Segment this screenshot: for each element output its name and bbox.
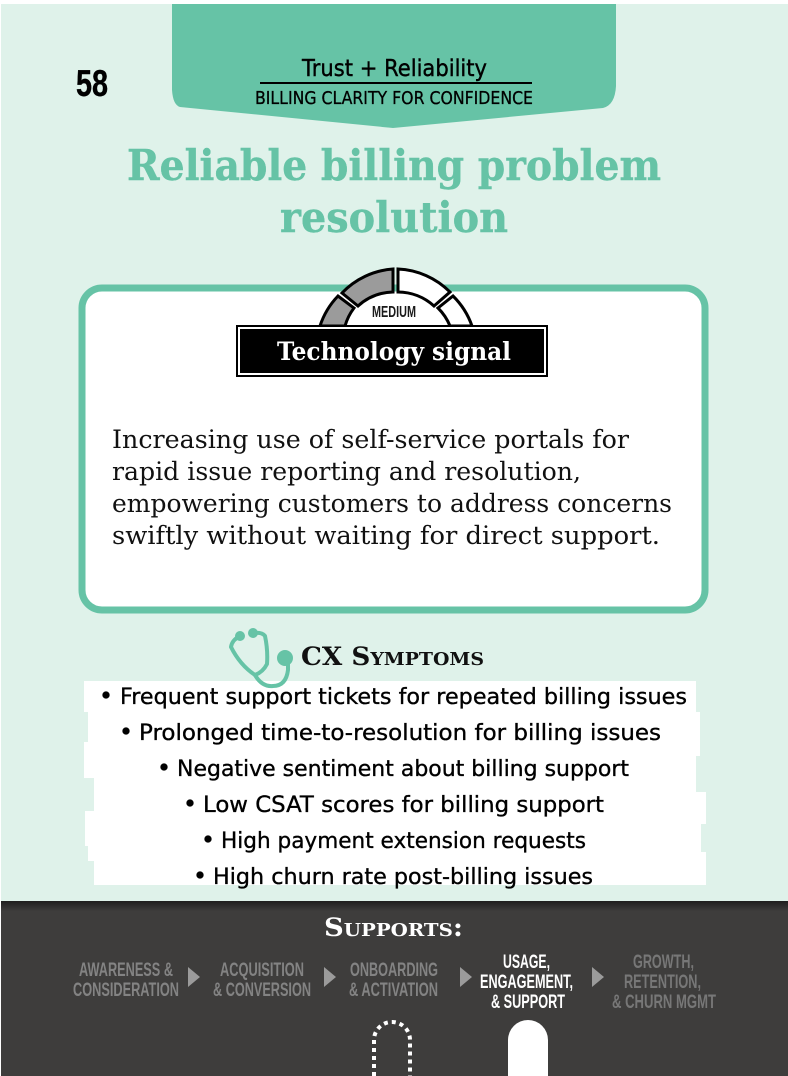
stage: usage (active): USAGE,: [503, 951, 550, 973]
stage: onboarding: ONBOARDING: [350, 959, 438, 981]
panel: supports footer: [1, 901, 788, 1076]
technology signal label: Technology signal: [277, 337, 511, 366]
stage: onboarding: [349, 959, 438, 1001]
symptoms list: [102, 685, 687, 890]
stage: usage (active): ENGAGEMENT,: [480, 971, 573, 993]
symptoms list: Low CSAT scores for billing support: [203, 793, 604, 818]
stage: growth: GROWTH,: [633, 951, 694, 973]
body text: empowering customers to address concerns: [112, 489, 672, 518]
body text: rapid issue reporting and resolution,: [112, 457, 581, 486]
white strips behind symptoms: [84, 681, 706, 885]
arrow: [460, 967, 472, 987]
heading: CX symptoms: CX Symptoms: [301, 642, 484, 671]
body text: Increasing use of self-service portals for: [112, 425, 629, 454]
gauge label: MEDIUM: [372, 304, 416, 321]
symptoms list: High payment extension requests: [221, 829, 586, 854]
body text: [112, 425, 672, 550]
technology signal label: [236, 325, 548, 377]
title: resolution: [280, 193, 508, 242]
category heading: Trust + Reliability: [301, 56, 487, 82]
symptoms list: Prolonged time-to-resolution for billing issues: [139, 721, 661, 746]
header banner: [172, 4, 616, 128]
stage: awareness: [73, 959, 179, 1001]
marker: dotted tab: [374, 1022, 410, 1076]
gauge: medium: [320, 269, 472, 326]
symptoms list: Frequent support tickets for repeated billing issues: [120, 685, 687, 710]
stage: growth: [612, 951, 716, 1013]
stage: usage (active): & SUPPORT: [491, 991, 565, 1013]
stage: onboarding: & ACTIVATION: [349, 979, 438, 1001]
category subheading: BILLING CLARITY FOR CONFIDENCE: [255, 88, 533, 109]
body text: swiftly without waiting for direct support.: [112, 521, 660, 550]
symptoms list: High churn rate post-billing issues: [213, 865, 593, 890]
symptoms list: Negative sentiment about billing support: [177, 757, 629, 782]
arrow: [188, 967, 200, 987]
stage: awareness: AWARENESS &: [79, 959, 173, 981]
stage: acquisition: ACQUISITION: [220, 959, 304, 981]
icon: stethoscope: [231, 630, 291, 686]
title: [127, 141, 661, 242]
stage: growth: RETENTION,: [624, 971, 701, 993]
heading: supports: Supports:: [324, 913, 463, 942]
stage: growth: & CHURN MGMT: [612, 991, 716, 1013]
arrow: [324, 967, 336, 987]
marker: active tab: [508, 1020, 548, 1076]
arrow: [592, 967, 604, 987]
stage: acquisition: [213, 959, 311, 1001]
title: Reliable billing problem: [127, 141, 661, 190]
panel: technology signal card: [82, 288, 705, 610]
stage: awareness: CONSIDERATION: [73, 979, 179, 1001]
page number: 58: [76, 63, 108, 104]
stage: acquisition: & CONVERSION: [213, 979, 311, 1001]
stage: usage (active): [480, 951, 573, 1013]
